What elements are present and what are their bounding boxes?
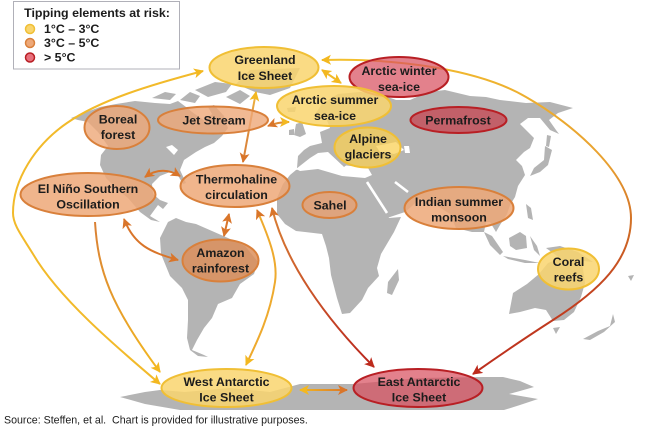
node: Permafrost (410, 107, 506, 133)
legend title: Tipping elements at risk: (24, 6, 170, 20)
node: Alpine glaciers: Alpine (349, 132, 387, 146)
Australia (509, 250, 585, 321)
North America (71, 101, 228, 222)
node: East Antarctic Ice Sheet (354, 369, 482, 407)
node: Indian summer monsoon: Indian summer (415, 195, 503, 209)
node: Greenland Ice Sheet (210, 47, 318, 88)
Eurasia (297, 90, 573, 232)
node: East Antarctic Ice Sheet: East Antarctic (378, 375, 461, 389)
node: Arctic summer sea-ice: sea-ice (314, 109, 356, 123)
node: West Antarctic Ice Sheet: Ice Sheet (199, 390, 254, 404)
Great Lakes (166, 145, 178, 155)
source note: Source: Steffen, et al. Chart is provided for illustrative purposes. (4, 414, 308, 426)
arrow: ENSO to Amazon (124, 219, 178, 260)
node: Coral reefs: reefs (554, 270, 583, 284)
arrow: ENSO to West Antarctic (95, 222, 160, 372)
node: Amazon rainforest: Amazon (196, 246, 245, 260)
node: Jet Stream (158, 106, 268, 134)
node: Arctic summer sea-ice (277, 86, 391, 126)
arrow: left arc (13, 71, 203, 384)
node: Sahel (302, 192, 356, 218)
node: El Nino Southern Oscillation (20, 173, 156, 216)
arrow: West to East Antarctic (300, 389, 347, 391)
node: Arctic winter sea-ice: sea-ice (378, 80, 420, 94)
arrow: Greenland to Thermohaline (243, 92, 256, 162)
New Zealand (583, 275, 634, 340)
arrow: right arc (322, 60, 631, 374)
arrow: Greenland to Arctic summer (322, 70, 341, 83)
legend item: 3–5 C: 3°C – 5°C (44, 36, 99, 50)
arrow: Thermohaline to Amazon (224, 214, 229, 236)
node: Greenland Ice Sheet: Greenland (234, 53, 296, 67)
legend (14, 2, 180, 69)
Arctic islands (152, 82, 250, 104)
Japan (530, 146, 552, 176)
node: Permafrost: Permafrost (425, 114, 491, 128)
node: Coral reefs (538, 248, 599, 290)
node: Indian summer monsoon: monsoon (431, 210, 487, 224)
node: Boreal forest: forest (101, 128, 135, 142)
legend item: above 5 C: > 5°C (44, 50, 76, 64)
South America (160, 218, 258, 357)
node: Arctic summer sea-ice: Arctic summer (292, 93, 379, 107)
arrow: Thermohaline to West Antarctic (246, 210, 276, 365)
Tasmania (553, 327, 560, 334)
node: Thermohaline circulation: circulation (205, 188, 268, 202)
node: Alpine glaciers: glaciers (345, 148, 392, 162)
Italy (329, 152, 348, 167)
Africa (277, 165, 401, 314)
arrow: ENSO to Thermohaline (145, 171, 180, 177)
node: El Nino Southern Oscillation: El Niño Southern (38, 182, 138, 196)
node: Thermohaline circulation: Thermohaline (196, 172, 277, 186)
Kamchatka Sakhalin (546, 135, 551, 147)
node: Coral reefs: Coral (553, 255, 584, 269)
node: Indian summer monsoon (404, 187, 514, 229)
node: West Antarctic Ice Sheet: West Antarctic (183, 375, 270, 389)
node: Boreal forest: Boreal (99, 112, 137, 126)
node: El Nino Southern Oscillation: Oscillation (56, 198, 120, 212)
node: Boreal forest (84, 106, 150, 149)
node: Alpine glaciers (334, 128, 400, 168)
arrow: Jet Stream to Arctic summer (268, 122, 289, 126)
node: Greenland Ice Sheet: Ice Sheet (238, 69, 292, 83)
legend item: above 5 C (26, 50, 76, 64)
world map (71, 68, 634, 410)
node: East Antarctic Ice Sheet: Ice Sheet (392, 390, 446, 404)
node: Arctic winter sea-ice: Arctic winter (361, 64, 437, 78)
inland seas (296, 152, 372, 178)
arrow: Thermohaline to East Antarctic (272, 208, 374, 367)
British Isles (287, 107, 306, 137)
arrows (13, 60, 631, 390)
node: Amazon rainforest: rainforest (192, 262, 249, 276)
node: Jet Stream: Jet Stream (182, 114, 246, 128)
legend item: 1–3 C: 1°C – 3°C (44, 22, 99, 36)
Southeast Asia islands (484, 204, 593, 263)
Madagascar (387, 269, 399, 295)
node: Thermohaline circulation (180, 165, 290, 207)
node: Amazon rainforest (182, 240, 258, 282)
node: Arctic winter sea-ice (350, 57, 448, 97)
Antarctica (120, 377, 538, 410)
node: Sahel: Sahel (313, 198, 347, 212)
Greenland (236, 68, 300, 95)
node: West Antarctic Ice Sheet (162, 369, 292, 407)
